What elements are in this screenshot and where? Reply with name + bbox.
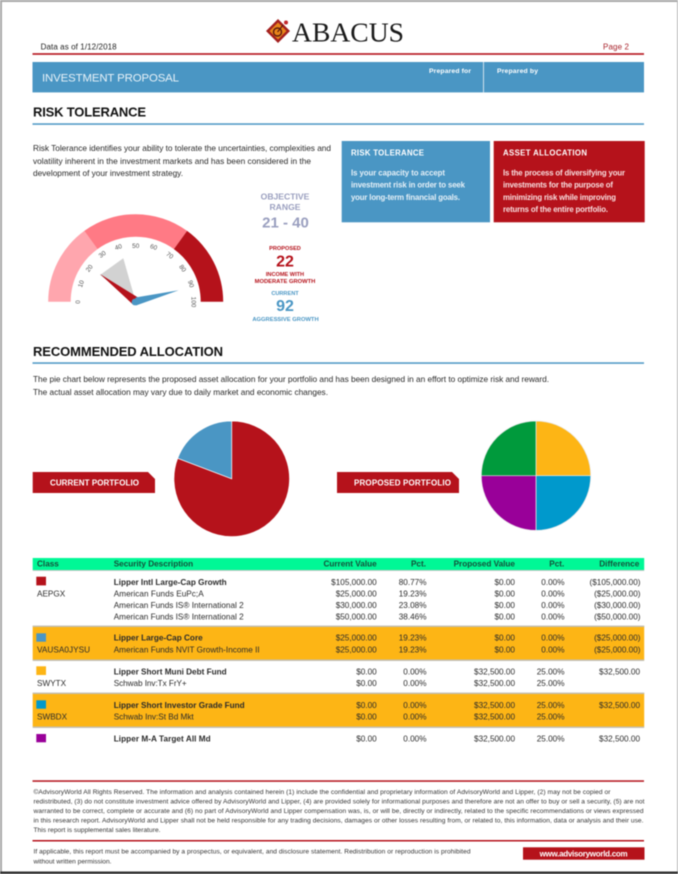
legal disclaimer: redistributed, (3) do not constitute investment advice offered by AdvisoryWorld and Lipper, (4) are provided solely for informational purposes and therefore are not an offer to buy or sell a security, (5) are not xyxy=(34,798,645,806)
row: Lipper Intl Large-Cap Growth: $0.00 xyxy=(494,601,515,610)
legal disclaimer xyxy=(32,788,645,834)
row: Lipper Intl Large-Cap Growth: 0.00% xyxy=(541,578,564,587)
row: Lipper Short Muni Debt Fund: 0.00% xyxy=(403,679,426,688)
row: Lipper Intl Large-Cap Growth: 80.77% xyxy=(399,578,426,587)
current score xyxy=(252,291,319,323)
row: Lipper M-A Target All Md: 25.00% xyxy=(537,734,564,743)
row: Lipper Intl Large-Cap Growth: $25,000.00 xyxy=(336,590,377,598)
panel: risk tolerance definition: RISK TOLERANCE xyxy=(351,149,424,158)
row: Lipper M-A Target All Md: $32,500.00 xyxy=(599,734,640,743)
slice: large-cap core 19.23% xyxy=(178,421,232,479)
row: Lipper Intl Large-Cap Growth xyxy=(36,577,641,622)
allocation intro text: The actual asset allocation may vary due to daily market and economic changes. xyxy=(33,387,328,397)
current score: AGGRESSIVE GROWTH xyxy=(252,317,319,323)
row: Lipper Short Muni Debt Fund: $32,500.00 xyxy=(474,679,515,688)
row: Lipper Intl Large-Cap Growth: $30,000.00 xyxy=(336,601,377,610)
label: proposed portfolio: PROPOSED PORTFOLIO xyxy=(354,479,451,488)
row: Lipper Intl Large-Cap Growth: 23.08% xyxy=(399,601,426,610)
table header: Security Description xyxy=(114,560,193,568)
row: Lipper Intl Large-Cap Growth: Lipper Intl Large-Cap Growth xyxy=(114,578,227,587)
row: Lipper Short Investor Grade Fund: Lipper Short Investor Grade Fund xyxy=(114,701,245,710)
row: Lipper Large-Cap Core: $0.00 xyxy=(494,633,515,642)
slice: intl large-cap growth 80.77% xyxy=(174,421,290,537)
risk tolerance intro text: Risk Tolerance identifies your ability to tolerate the uncertainties, complexities and xyxy=(33,143,331,153)
table header: Difference xyxy=(599,560,640,568)
row: Lipper Large-Cap Core: 19.23% xyxy=(399,646,426,655)
row: Lipper Intl Large-Cap Growth: $0.00 xyxy=(494,578,515,587)
objective range readout xyxy=(261,192,310,232)
row: Lipper Large-Cap Core: 0.00% xyxy=(541,633,564,642)
page number: Page 2 xyxy=(603,42,630,52)
website button xyxy=(523,847,644,860)
label: current portfolio: CURRENT PORTFOLIO xyxy=(50,479,139,488)
row: Lipper Intl Large-Cap Growth: ($105,000.00) xyxy=(590,578,641,587)
panel: risk tolerance definition: your long-term financial goals. xyxy=(351,193,460,202)
allocation intro text: The pie chart below represents the proposed asset allocation for your portfolio and has been designed in an effort to optimize risk and reward. xyxy=(33,374,549,384)
row: Lipper Short Muni Debt Fund: Schwab Inv:Tx FrY+ xyxy=(114,679,187,688)
table header: Class xyxy=(37,560,59,568)
row: Lipper M-A Target All Md: 0.00% xyxy=(403,734,426,743)
banner: investment proposal: Prepared by xyxy=(497,68,538,75)
row: Lipper Large-Cap Core: ($25,000.00) xyxy=(594,646,641,655)
table header: Proposed Value xyxy=(454,560,515,568)
row: Lipper Intl Large-Cap Growth: $105,000.00 xyxy=(331,578,377,587)
gauge tick labels: 60 xyxy=(149,243,158,252)
row: Lipper Short Muni Debt Fund xyxy=(36,666,640,688)
row: Lipper Intl Large-Cap Growth: 0.00% xyxy=(541,612,564,622)
proposed score: PROPOSED xyxy=(269,246,301,252)
prospectus note xyxy=(32,848,471,866)
banner: investment proposal: INVESTMENT PROPOSAL xyxy=(42,72,179,84)
slice: short investor grade 25% xyxy=(536,476,591,530)
table header xyxy=(33,558,644,571)
gauge tick labels: 20 xyxy=(85,263,95,274)
current needle xyxy=(132,290,179,306)
row: Lipper Large-Cap Core: VAUSA0JYSU xyxy=(37,646,90,655)
table header: Pct. xyxy=(411,560,426,568)
row: Lipper M-A Target All Md: $0.00 xyxy=(356,734,377,743)
website button: www.advisoryworld.com xyxy=(539,850,628,858)
allocation table xyxy=(33,558,644,743)
proposed score xyxy=(255,246,315,285)
table header: Pct. xyxy=(549,560,564,568)
row: Lipper Intl Large-Cap Growth: 19.23% xyxy=(399,590,426,598)
gauge tick labels: 40 xyxy=(114,243,123,252)
gauge band: middle xyxy=(84,214,187,249)
row: Lipper M-A Target All Md xyxy=(36,734,640,743)
gauge tick labels xyxy=(75,243,196,308)
risk tolerance intro text: development of your investment strategy. xyxy=(33,168,183,178)
row: Lipper Large-Cap Core xyxy=(33,626,644,661)
heading: recommended allocation: RECOMMENDED ALLOCATION xyxy=(33,344,223,359)
banner: investment proposal xyxy=(32,62,644,92)
pie chart: current portfolio xyxy=(174,421,290,537)
pie chart: proposed portfolio xyxy=(481,421,591,530)
row: Lipper Short Muni Debt Fund: $0.00 xyxy=(356,667,377,676)
row: Lipper Short Muni Debt Fund: $32,500.00 xyxy=(599,667,640,676)
slice: large-cap core 25% xyxy=(481,421,536,476)
row: Lipper Short Investor Grade Fund: $32,500.00 xyxy=(474,701,515,710)
gauge band: low xyxy=(48,231,98,302)
label: current portfolio xyxy=(33,472,155,493)
prospectus note: If applicable, this report must be accompanied by a prospectus, or equivalent, and disclosure statement. Redistribution or reproduction is prohibited xyxy=(34,848,471,856)
proposed needle xyxy=(100,274,138,305)
legal disclaimer: ©AdvisoryWorld All Rights Reserved. The information and analysis contained herein (1) include the confidential and proprietary information of AdvisoryWorld and Lipper, (2) may not be copied or xyxy=(34,788,611,796)
objective range readout: OBJECTIVE xyxy=(261,192,310,202)
banner: investment proposal: Prepared for xyxy=(429,68,471,75)
panel: risk tolerance definition: Is your capacity to accept xyxy=(351,169,445,178)
legal disclaimer: This report is supplemental sales literature. xyxy=(34,827,161,834)
row: Lipper Large-Cap Core: $0.00 xyxy=(494,646,515,655)
panel: asset allocation definition: returns of the entire portfolio. xyxy=(503,205,608,214)
table header: Current Value xyxy=(323,560,377,568)
slice: m-a target 25% xyxy=(481,476,536,530)
row: Lipper Intl Large-Cap Growth: $0.00 xyxy=(494,590,515,598)
gauge tick labels: 70 xyxy=(164,251,175,261)
row: Lipper Short Investor Grade Fund: $0.00 xyxy=(356,712,377,721)
row: Lipper Intl Large-Cap Growth: AEPGX xyxy=(37,590,66,598)
row: Lipper Large-Cap Core: 19.23% xyxy=(399,633,426,642)
objective range readout: RANGE xyxy=(269,202,301,212)
gauge tick labels: 100 xyxy=(190,297,196,308)
row: Lipper Short Muni Debt Fund: $32,500.00 xyxy=(474,667,515,676)
gauge tick labels: 10 xyxy=(77,279,86,288)
row: Lipper M-A Target All Md: $32,500.00 xyxy=(474,734,515,743)
row: Lipper Intl Large-Cap Growth: American Funds IS® International 2 xyxy=(114,612,244,622)
row: Lipper Large-Cap Core: $25,000.00 xyxy=(336,646,377,655)
gauge band: high xyxy=(174,231,223,302)
logo: Abacus: ABACUS xyxy=(292,16,404,48)
row: Lipper Short Investor Grade Fund: 0.00% xyxy=(403,701,426,710)
row: Lipper Intl Large-Cap Growth: 0.00% xyxy=(541,590,564,598)
row: Lipper Intl Large-Cap Growth: ($50,000.00) xyxy=(594,612,641,622)
row: Lipper Intl Large-Cap Growth: American Funds EuPc;A xyxy=(114,590,204,598)
row: Lipper Short Investor Grade Fund: $32,500.00 xyxy=(599,701,640,710)
proposed score: 22 xyxy=(276,254,294,270)
gauge tick labels: 90 xyxy=(186,280,195,289)
row: Lipper Short Muni Debt Fund: SWYTX xyxy=(37,679,67,688)
row: Lipper Short Investor Grade Fund xyxy=(33,692,644,728)
row: Lipper Intl Large-Cap Growth: $0.00 xyxy=(494,612,515,622)
row: Lipper Short Muni Debt Fund: 0.00% xyxy=(403,667,426,676)
row: Lipper Large-Cap Core: Lipper Large-Cap Core xyxy=(114,633,203,642)
current score: 92 xyxy=(276,298,294,315)
gauge tick labels: 50 xyxy=(132,243,140,250)
row: Lipper Intl Large-Cap Growth: 0.00% xyxy=(541,601,564,610)
panel: asset allocation definition: ASSET ALLOCATION xyxy=(503,149,587,158)
row: Lipper Short Muni Debt Fund: 25.00% xyxy=(537,667,564,676)
heading: risk tolerance: RISK TOLERANCE xyxy=(33,104,146,120)
panel: risk tolerance definition: investment risk in order to seek xyxy=(351,181,466,190)
gauge tick labels: 0 xyxy=(75,300,82,304)
panel: risk tolerance definition xyxy=(342,141,490,222)
row: Lipper Short Investor Grade Fund: $0.00 xyxy=(356,701,377,710)
row: Lipper Short Investor Grade Fund: 25.00% xyxy=(537,712,564,721)
row: Lipper Intl Large-Cap Growth: 38.46% xyxy=(399,612,426,622)
risk tolerance intro text: volatility inherent in the investment markets and has been considered in the xyxy=(33,156,311,166)
current score: CURRENT xyxy=(271,291,299,297)
row: Lipper Large-Cap Core: 0.00% xyxy=(541,646,564,655)
panel: asset allocation definition: Is the process of diversifying your xyxy=(503,169,625,178)
proposed score: MODERATE GROWTH xyxy=(255,279,315,285)
allocation intro text xyxy=(33,374,549,397)
risk tolerance intro text xyxy=(33,143,331,178)
row: Lipper Intl Large-Cap Growth: American Funds IS® International 2 xyxy=(114,601,244,610)
row: Lipper Large-Cap Core: American Funds NVIT Growth-Income II xyxy=(114,646,260,655)
row: Lipper Large-Cap Core: ($25,000.00) xyxy=(594,633,641,642)
gauge chart xyxy=(48,214,223,308)
row: Lipper Intl Large-Cap Growth: ($30,000.00) xyxy=(594,601,641,610)
row: Lipper Short Muni Debt Fund: 25.00% xyxy=(537,679,564,688)
row: Lipper Short Muni Debt Fund: Lipper Short Muni Debt Fund xyxy=(114,667,227,676)
label: proposed portfolio xyxy=(337,472,459,493)
proposed score: INCOME WITH xyxy=(266,272,304,278)
prospectus note: without written permission. xyxy=(32,858,112,866)
gauge tick labels: 30 xyxy=(98,250,108,260)
panel: asset allocation definition xyxy=(494,141,645,222)
row: Lipper Short Investor Grade Fund: 25.00% xyxy=(537,701,564,710)
row: Lipper Short Investor Grade Fund: 0.00% xyxy=(403,712,426,721)
legal disclaimer: in this research report. AdvisoryWorld and Lipper shall not be held responsible for any trading decisions, damages or other losses resulting from, or related to, this information, data or analysis and their use. xyxy=(34,818,644,824)
row: Lipper Large-Cap Core: $25,000.00 xyxy=(336,633,377,642)
row: Lipper Intl Large-Cap Growth: ($25,000.00) xyxy=(594,590,641,598)
objective range readout: 21 - 40 xyxy=(262,215,309,232)
row: Lipper Short Investor Grade Fund: $32,500.00 xyxy=(474,712,515,721)
objective range wedge xyxy=(100,258,136,302)
row: Lipper Short Investor Grade Fund: SWBDX xyxy=(37,712,68,721)
row: Lipper Intl Large-Cap Growth: $50,000.00 xyxy=(336,612,377,622)
data date: Data as of 1/12/2018 xyxy=(41,42,117,52)
panel: asset allocation definition: investments for the purpose of xyxy=(503,181,613,190)
slice: short muni debt 25% xyxy=(536,421,591,476)
row: Lipper M-A Target All Md: Lipper M-A Target All Md xyxy=(114,734,211,743)
legal disclaimer: warranted to be correct, complete or accurate and (6) no part of AdvisoryWorld and Lipper compensation was, is, or will be, directly or indirectly, related to the specific recommendations or views expressed xyxy=(32,808,644,815)
row: Lipper Short Muni Debt Fund: $0.00 xyxy=(356,679,377,688)
row: Lipper Short Investor Grade Fund: Schwab Inv:St Bd Mkt xyxy=(114,712,194,721)
gauge tick labels: 80 xyxy=(177,264,187,274)
panel: asset allocation definition: minimizing risk while improving xyxy=(503,193,616,202)
